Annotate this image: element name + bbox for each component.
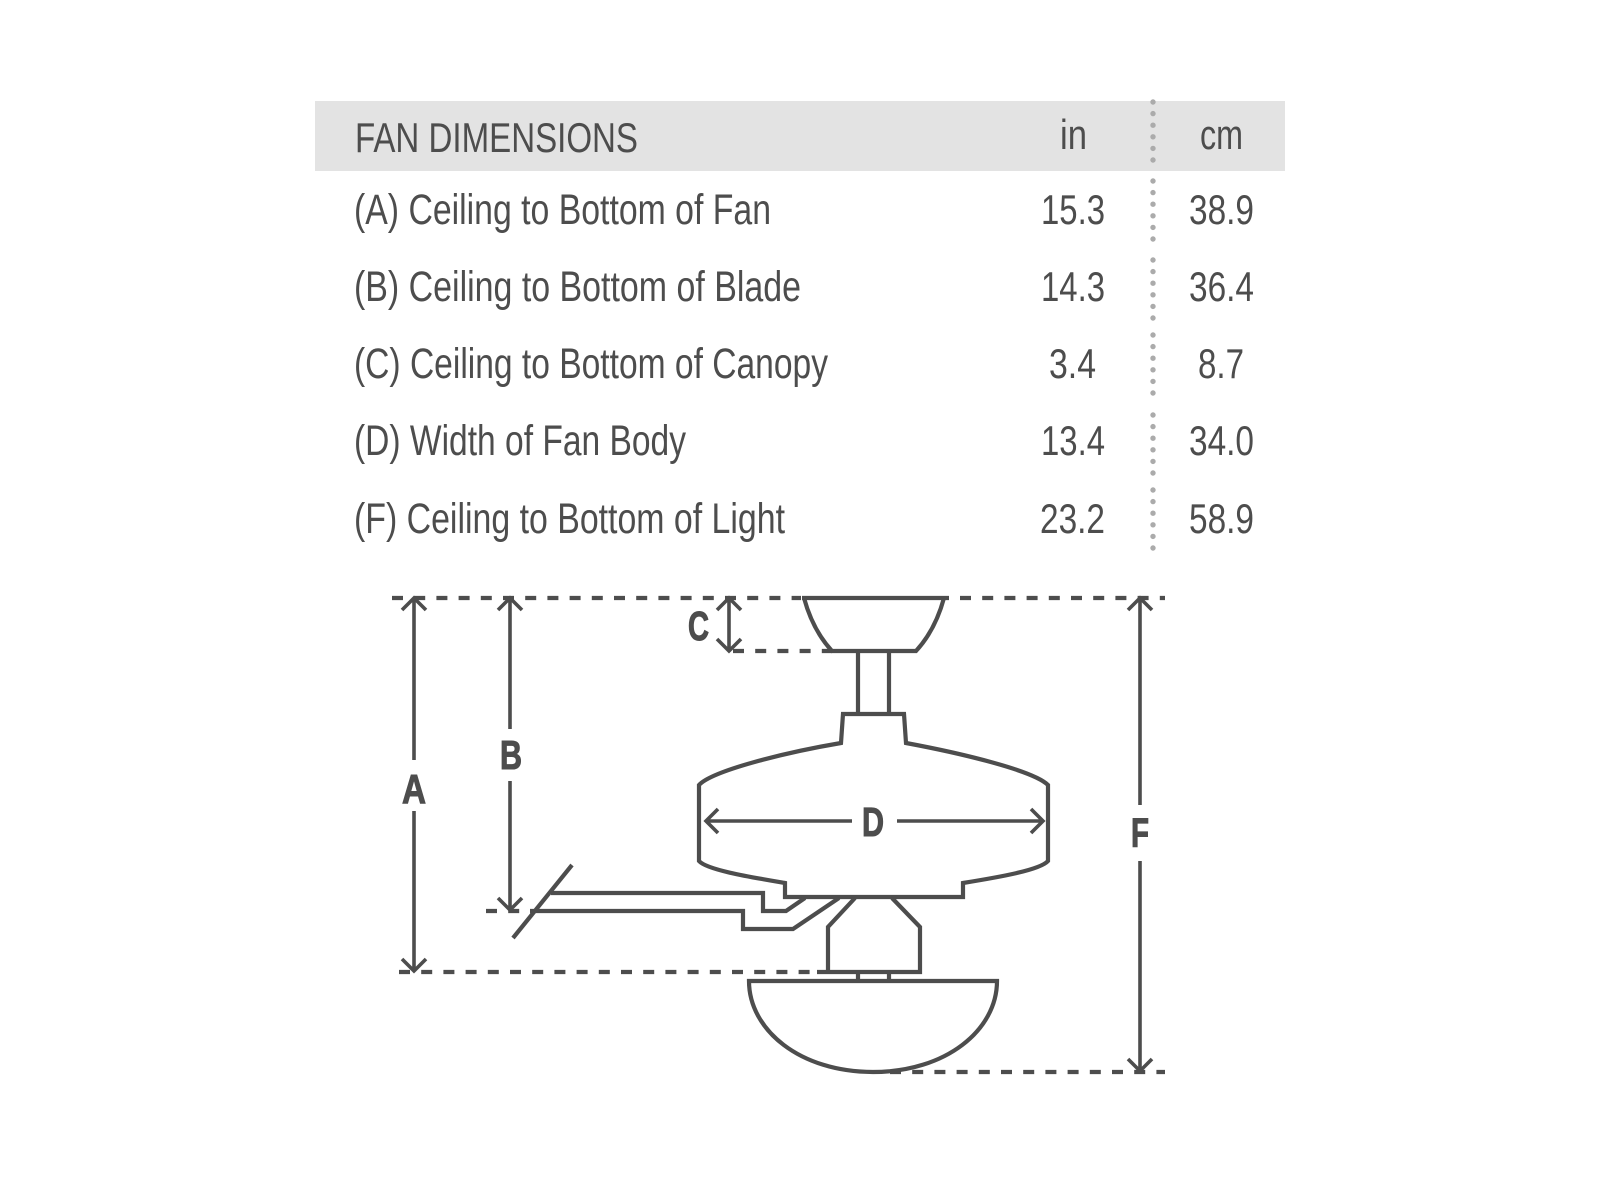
row B: 14.3 — [1041, 263, 1105, 310]
ceiling fan dimension diagram — [392, 598, 1165, 1072]
row F — [354, 495, 1254, 543]
row A — [354, 186, 1254, 234]
row B — [354, 263, 1254, 311]
table header band — [315, 101, 1285, 171]
row A: 38.9 — [1189, 186, 1254, 233]
dimension D: D — [862, 799, 884, 845]
dimension B — [498, 598, 522, 910]
dimension D — [706, 799, 1043, 845]
light bowl — [749, 981, 997, 1072]
row D — [354, 417, 1254, 465]
row F: 58.9 — [1189, 495, 1254, 542]
dimension B: B — [500, 732, 522, 778]
dimension F — [1128, 598, 1152, 1071]
dimension A — [402, 598, 426, 971]
motor housing — [699, 714, 1048, 897]
column header: inches: in — [1060, 111, 1087, 158]
dimension F: F — [1131, 810, 1149, 856]
row C: 3.4 — [1049, 340, 1096, 387]
row C — [354, 340, 1244, 388]
fan blade — [513, 865, 839, 938]
row A: 15.3 — [1041, 186, 1105, 233]
heading: fan dimensions: FAN DIMENSIONS — [355, 114, 638, 161]
row B: 36.4 — [1189, 263, 1254, 310]
row C: (C) Ceiling to Bottom of Canopy — [354, 340, 828, 388]
row C: 8.7 — [1198, 340, 1244, 387]
dimension C — [688, 598, 741, 651]
column header: centimetres: cm — [1200, 111, 1243, 158]
row F: (F) Ceiling to Bottom of Light — [354, 495, 785, 543]
light connector — [858, 972, 889, 981]
dimension A: A — [402, 766, 426, 812]
row F: 23.2 — [1040, 495, 1105, 542]
dimension C: C — [688, 603, 709, 649]
fan canopy — [802, 598, 949, 651]
row A: (A) Ceiling to Bottom of Fan — [354, 186, 771, 234]
row D: 34.0 — [1189, 417, 1254, 464]
row D: (D) Width of Fan Body — [354, 417, 686, 465]
dimensions table — [315, 101, 1285, 550]
light neck — [817, 898, 920, 972]
row D: 13.4 — [1041, 417, 1105, 464]
row B: (B) Ceiling to Bottom of Blade — [354, 263, 801, 311]
downrod — [858, 651, 889, 714]
